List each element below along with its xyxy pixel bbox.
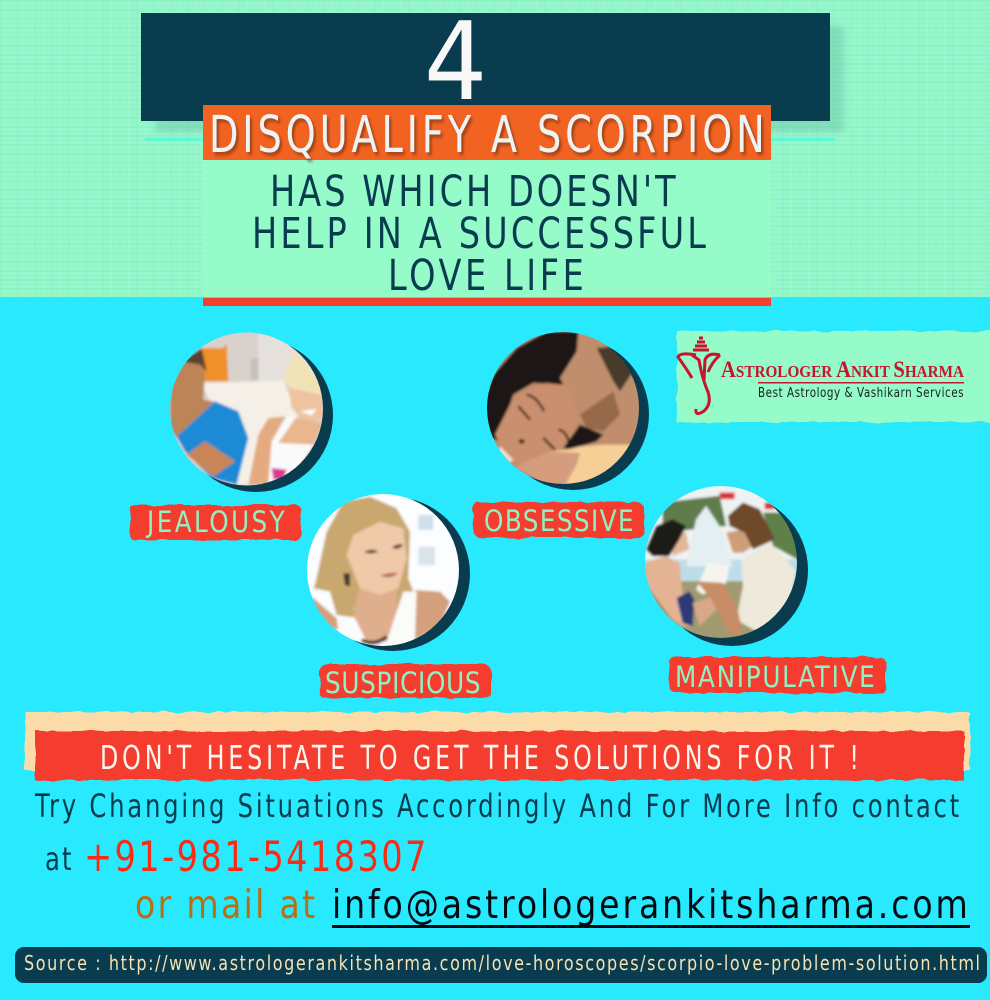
heading: disqualify a scorpion: DISQUALIFY A SCORPION (209, 104, 765, 164)
mail line: or mail at (135, 881, 315, 928)
contact line: Try Changing Situations Accordingly And For More Info contact (34, 788, 959, 825)
phone line: at (45, 841, 72, 878)
title number: 4 (424, 0, 487, 125)
mail line: info@astrologerankitsharma.com (332, 881, 968, 928)
callout text: DON'T HESITATE TO GET THE SOLUTIONS FOR IT ! (100, 738, 859, 777)
background: mint textured header (0, 0, 990, 297)
subheading (252, 167, 706, 301)
brand name: ASTROLOGER ANKIT SHARMA (721, 357, 965, 382)
subheading: HELP IN A SUCCESSFUL (252, 209, 706, 259)
label: obsessive: OBSESSIVE (484, 505, 634, 539)
callout panel (25, 712, 970, 780)
photo circle: manipulative (642, 484, 808, 646)
header banner (141, 0, 844, 141)
photo circle: suspicious (303, 492, 470, 652)
phone line: +91-981-5418307 (84, 832, 426, 881)
label: jealousy: JEALOUSY (145, 506, 285, 540)
brand tagline: Best Astrology & Vashikarn Services (758, 385, 964, 400)
logo panel (677, 331, 990, 422)
icon: ganesha logo (678, 338, 720, 414)
photo circle: obsessive (487, 332, 649, 490)
photo circle: jealousy (170, 332, 333, 492)
source bar (15, 947, 987, 983)
source bar: Source : http://www.astrologerankitsharma.com/love-horoscopes/scorpio-love-problem-solution.html (24, 952, 980, 976)
label: manipulative: MANIPULATIVE (675, 661, 875, 695)
title panel (203, 104, 771, 306)
subheading: HAS WHICH DOESN'T (270, 167, 676, 217)
label: suspicious: SUSPICIOUS (325, 667, 481, 701)
subheading: LOVE LIFE (388, 251, 584, 301)
